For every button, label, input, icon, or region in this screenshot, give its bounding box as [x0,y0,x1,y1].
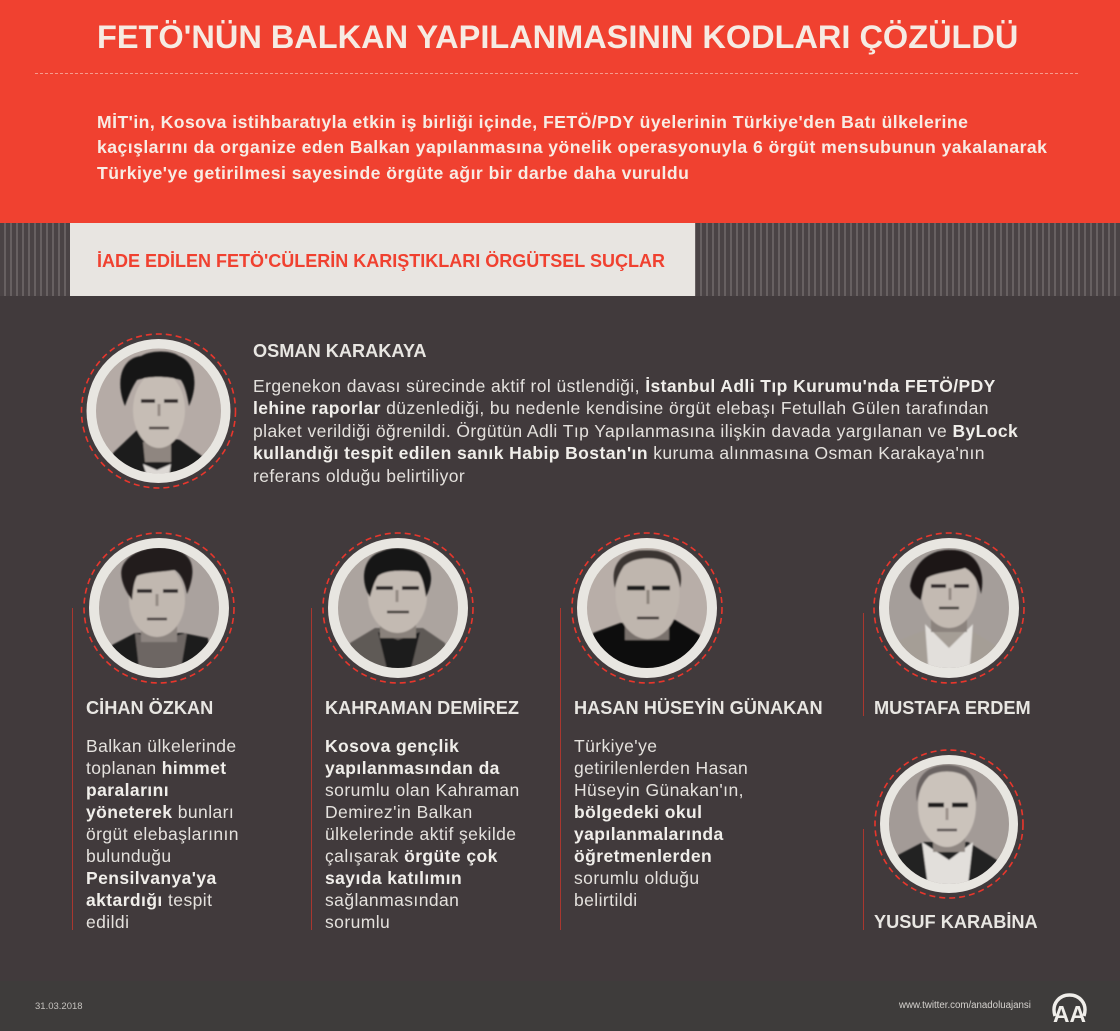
portrait: Mustafa Erdem [873,532,1025,684]
description: Kahraman Demirez: sayıda katılımın [325,868,462,888]
description: Cihan Özkan: yöneterek bunları [86,802,234,822]
intro text: kaçışlarını da organize eden Balkan yapılanmasına yönelik operasyonuyla 6 örgüt mensubunun yakalanarak [97,137,1047,157]
panel: section heading banner [70,223,695,296]
description: Kahraman Demirez: ülkelerinde aktif şekilde [325,824,516,844]
description: Kahraman Demirez: Kosova gençlik [325,736,459,756]
name: Hasan Hüseyin Günakan: HASAN HÜSEYİN GÜNAKAN [574,698,823,718]
panel: footer [0,981,1120,1031]
portrait: Hasan Hüseyin Günakan [571,532,723,684]
social link: www.twitter.com/anadoluajansi [899,1000,1031,1011]
description: Hasan Hüseyin Günakan: Türkiye'ye [574,736,657,756]
portrait: Yusuf Karabina [874,749,1024,899]
date: 31.03.2018 [35,1001,83,1012]
description: Kahraman Demirez: sağlanmasından [325,890,459,910]
name: Cihan Özkan: CİHAN ÖZKAN [86,698,213,718]
description: Osman Karakaya: kullandığı tespit edilen sanık Habip Bostan'ın kuruma alınmasına Osman Karakaya'nın [253,443,985,463]
name: Mustafa Erdem: MUSTAFA ERDEM [874,698,1031,718]
description: Kahraman Demirez: Demirez'in Balkan [325,802,473,822]
description: Osman Karakaya: plaket verildiği öğrenildi. Örgütün Adli Tıp Yapılanmasına ilişkin davada yargılanan ve ByLock [253,421,1018,441]
description: Osman Karakaya: lehine raporlar düzenlediği, bu nedenle kendisine örgüt elebaşı Fetullah Gülen tarafından [253,398,989,418]
intro text [97,112,1047,183]
description: Hasan Hüseyin Günakan: belirtildi [574,890,638,910]
description: Hasan Hüseyin Günakan [574,736,748,910]
description: Cihan Özkan: aktardığı tespit [86,890,212,910]
description: Cihan Özkan: edildi [86,912,129,932]
description: Cihan Özkan: Pensilvanya'ya [86,868,217,888]
description: Kahraman Demirez: yapılanmasından da [325,758,500,778]
description: Cihan Özkan: toplanan himmet [86,758,227,778]
description: Osman Karakaya: referans olduğu belirtiliyor [253,466,465,486]
name: Yusuf Karabina: YUSUF KARABİNA [874,912,1038,932]
description: Cihan Özkan: örgüt elebaşlarının [86,824,239,844]
description: Hasan Hüseyin Günakan: yapılanmalarında [574,824,724,844]
striped band [0,223,1120,296]
description: Cihan Özkan [86,736,239,932]
text block: Osman Karakaya [253,341,1018,486]
description: Hasan Hüseyin Günakan: bölgedeki okul [574,802,702,822]
description: Cihan Özkan: Balkan ülkelerinde [86,736,237,756]
column: Kahraman Demirez [325,698,520,932]
description: Osman Karakaya: Ergenekon davası sürecinde aktif rol üstlendiği, İstanbul Adli Tıp Kurumu'nda FETÖ/PDY [253,376,996,396]
intro text: Türkiye'ye getirilmesi sayesinde örgüte ağır bir darbe daha vuruldu [97,163,689,183]
intro text: MİT'in, Kosova istihbaratıyla etkin iş birliği içinde, FETÖ/PDY üyelerinin Türkiye'den Batı ülkelerine [97,112,968,132]
name: Osman Karakaya: OSMAN KARAKAYA [253,341,426,361]
portrait: Osman Karakaya [80,333,236,489]
description: Kahraman Demirez: sorumlu olan Kahraman [325,780,520,800]
title: FETÖ'NÜN BALKAN YAPILANMASININ KODLARI ÇÖZÜLDÜ [97,19,1018,55]
description: Kahraman Demirez: çalışarak örgüte çok [325,846,498,866]
portrait: Cihan Özkan [83,532,235,684]
description: Hasan Hüseyin Günakan: öğretmenlerden [574,846,712,866]
name: Kahraman Demirez: KAHRAMAN DEMİREZ [325,698,519,718]
description: Cihan Özkan: bulunduğu [86,846,172,866]
portrait: Kahraman Demirez [322,532,474,684]
description: Cihan Özkan: paralarını [86,780,169,800]
description: Hasan Hüseyin Günakan: getirilenlerden Hasan [574,758,748,778]
column: Cihan Özkan [86,698,239,932]
description: Kahraman Demirez: sorumlu [325,912,390,932]
column: Hasan Hüseyin Günakan [574,698,823,910]
description: Hasan Hüseyin Günakan: Hüseyin Günakan'ın, [574,780,744,800]
description: Osman Karakaya [253,376,1018,486]
section heading: İADE EDİLEN FETÖ'CÜLERİN KARIŞTIKLARI ÖRGÜTSEL SUÇLAR [97,251,665,271]
description: Hasan Hüseyin Günakan: sorumlu olduğu [574,868,700,888]
description: Kahraman Demirez [325,736,520,932]
panel: red header [0,0,1120,223]
